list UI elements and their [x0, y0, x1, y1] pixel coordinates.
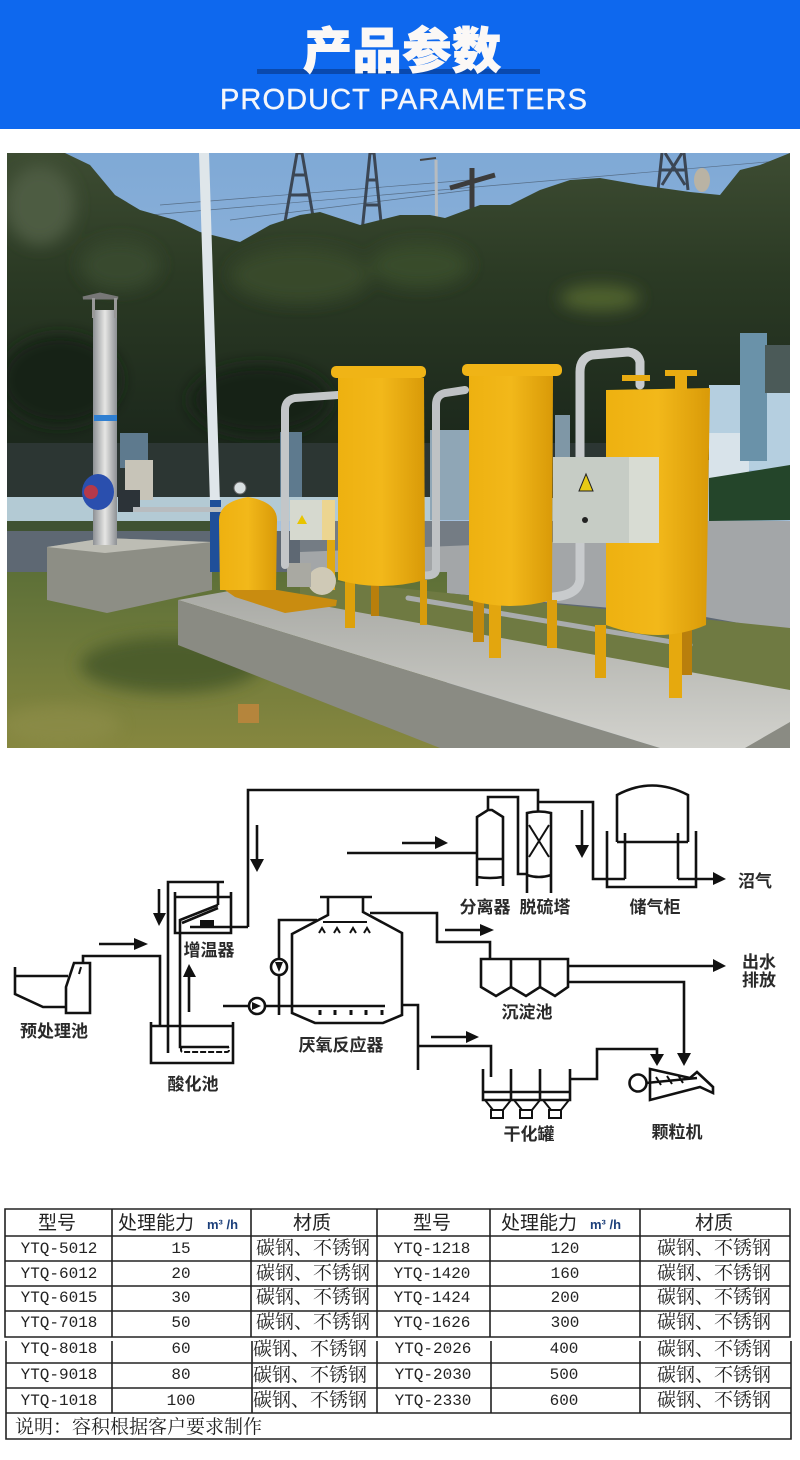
hedge: [709, 465, 790, 521]
heater: [175, 892, 248, 933]
diagram labels: [20, 872, 776, 1144]
table data rows: 300: [551, 1314, 579, 1332]
table data rows: YTQ-2030: [395, 1366, 471, 1384]
table data rows: 120: [551, 1240, 579, 1258]
table data rows: 30: [171, 1289, 191, 1307]
table header row: 型号: [413, 1212, 451, 1234]
diagram labels: 厌氧反应器: [298, 1035, 384, 1055]
table data rows: YTQ-2330: [395, 1392, 471, 1410]
power towers and poles: [154, 153, 770, 225]
pipes: [285, 352, 690, 645]
diagram labels: 预处理池: [20, 1022, 88, 1041]
table data rows: YTQ-5012: [21, 1240, 97, 1258]
road: [7, 531, 739, 623]
table data rows: YTQ-8018: [21, 1340, 97, 1358]
drying tank: [483, 1069, 570, 1118]
table data rows: YTQ-6012: [21, 1265, 97, 1283]
tree line: [7, 153, 790, 460]
diagram labels: 储气柜: [630, 898, 680, 917]
table data rows: 20: [171, 1265, 191, 1283]
table data rows: 碳钢、不锈钢: [657, 1262, 771, 1284]
anaerobic reactor: [223, 897, 402, 1023]
settling tank: [481, 959, 568, 996]
table data rows: 80: [171, 1366, 191, 1384]
pipe: drying tank to granulator: [570, 1049, 657, 1079]
table data rows: YTQ-2026: [395, 1340, 471, 1358]
table data rows: 碳钢、不锈钢: [657, 1364, 771, 1386]
pipe: pretreatment to acid tank: [83, 956, 160, 1027]
table data rows: 500: [550, 1366, 578, 1384]
photo: biogas purification equipment: [0, 153, 790, 748]
subtitle: PRODUCT PARAMETERS: [220, 84, 587, 116]
table data rows: 160: [551, 1265, 579, 1283]
table data rows: 碳钢、不锈钢: [256, 1286, 370, 1308]
street pole: [199, 153, 220, 503]
flare stack: [82, 294, 153, 545]
boundary wall: [7, 497, 437, 521]
flow arrows: [99, 810, 726, 1066]
table data rows: 碳钢、不锈钢: [256, 1311, 370, 1333]
table header row: [38, 1212, 733, 1234]
table data rows: 碳钢、不锈钢: [657, 1237, 771, 1259]
table data rows: 碳钢、不锈钢: [657, 1286, 771, 1308]
table data rows: YTQ-9018: [21, 1366, 97, 1384]
effluent and sludge pipes: [568, 966, 714, 1054]
table header row: 处理能力: [501, 1212, 577, 1234]
table data rows: 碳钢、不锈钢: [256, 1237, 370, 1259]
separator: [477, 797, 527, 886]
table data rows: 200: [551, 1289, 579, 1307]
table header row: m³ /h: [590, 1217, 621, 1232]
diagram labels: 沼气: [738, 872, 772, 891]
electrical control cabinet: [553, 457, 659, 543]
diagram labels: 干化罐: [504, 1124, 554, 1144]
diagram labels: 酸化池: [168, 1074, 218, 1094]
table header row: m³ /h: [207, 1217, 238, 1232]
pipe: reactor to drying tank: [402, 1005, 491, 1077]
diagram labels: 排放: [742, 971, 776, 990]
table data rows: 碳钢、不锈钢: [657, 1389, 771, 1411]
acidification tank: [151, 882, 233, 1063]
table data rows: 15: [171, 1240, 191, 1258]
biogas pipe: [248, 790, 625, 927]
process flow diagram: [15, 786, 726, 1118]
pretreatment tank: [15, 963, 90, 1013]
flare base block: [47, 538, 212, 613]
desulfurization tower: [527, 812, 551, 893]
table data rows: 100: [167, 1392, 195, 1410]
table data rows: [21, 1237, 771, 1411]
table header row: 处理能力: [118, 1212, 194, 1234]
box on ground: [238, 704, 259, 723]
table data rows: 60: [171, 1340, 191, 1358]
platform: [178, 590, 790, 748]
table data rows: YTQ-1420: [394, 1265, 470, 1283]
diagram labels: 脱硫塔: [520, 897, 570, 917]
table data rows: 碳钢、不锈钢: [253, 1389, 367, 1411]
table data rows: YTQ-1626: [394, 1314, 470, 1332]
table data rows: 碳钢、不锈钢: [657, 1311, 771, 1333]
blower and control box: [287, 500, 336, 595]
diagram labels: 沉淀池: [502, 1002, 552, 1022]
tank 1: [331, 366, 427, 628]
gas holder outlet: [678, 878, 714, 880]
table header row: 材质: [695, 1212, 733, 1234]
table data rows: 碳钢、不锈钢: [253, 1338, 367, 1360]
table data rows: 碳钢、不锈钢: [253, 1364, 367, 1386]
parameter table: [5, 1209, 791, 1439]
table data rows: 碳钢、不锈钢: [657, 1338, 771, 1360]
table data rows: YTQ-1018: [21, 1392, 97, 1410]
tank 2: [462, 364, 562, 658]
table header row: 材质: [293, 1212, 331, 1234]
table data rows: YTQ-1424: [394, 1289, 470, 1307]
table data rows: YTQ-1218: [394, 1240, 470, 1258]
diagram labels: 出水: [742, 953, 776, 972]
diagram labels: 颗粒机: [652, 1122, 702, 1142]
gas inlet line: [347, 852, 477, 854]
diagram labels: 增温器: [184, 941, 234, 960]
table data rows: 400: [550, 1340, 578, 1358]
small buffer tank: [219, 482, 337, 613]
title underline bar: [257, 69, 540, 74]
header banner: [0, 0, 800, 129]
table header row: 型号: [38, 1212, 76, 1234]
table data rows: YTQ-6015: [21, 1289, 97, 1307]
grass: [7, 572, 447, 748]
tank 3: [595, 370, 710, 698]
title: 产品参数: [303, 24, 501, 79]
table data rows: YTQ-7018: [21, 1314, 97, 1332]
table note: 说明：容积根据客户要求制作: [15, 1416, 262, 1438]
table grid: [5, 1209, 791, 1439]
table data rows: 碳钢、不锈钢: [256, 1262, 370, 1284]
table data rows: 600: [550, 1392, 578, 1410]
granulator: [630, 1069, 713, 1100]
pipe: reactor to settling tank: [370, 913, 490, 959]
diagram labels: 分离器: [460, 897, 510, 917]
gas holder: [607, 786, 696, 887]
fence: [7, 443, 606, 498]
table data rows: 50: [171, 1314, 191, 1332]
